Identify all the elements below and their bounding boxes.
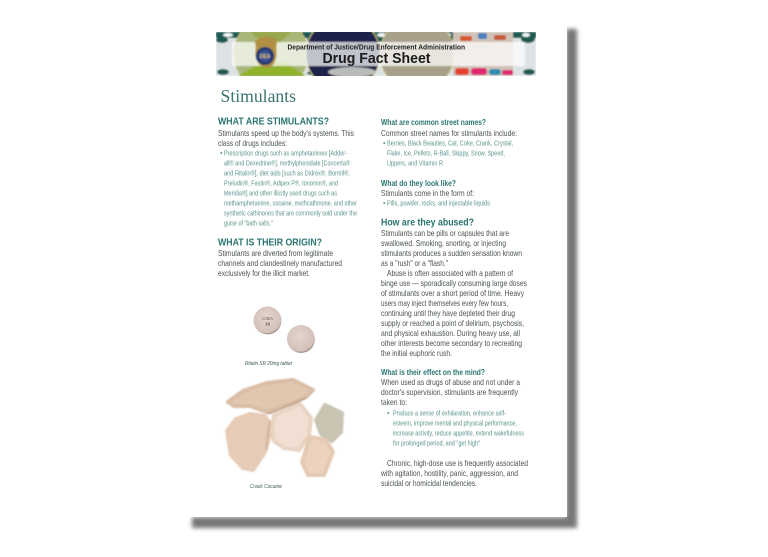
bullet list: street names: • xyxy=(383,138,386,148)
bullet list: street names: Uppers, and Vitamin R xyxy=(387,158,443,168)
bullet list: drugs: Preludin®, Fastin®, Adipex P®, Ionomin®, and xyxy=(224,178,338,188)
bullet list: street names: Flake, Ice, Pellets, R-Ball, Skippy, Snow, Speed, xyxy=(387,148,505,158)
text block: intro: class of drugs includes: xyxy=(218,139,287,148)
banner circle: powder xyxy=(380,32,454,76)
bullet: forms: Pills, powder, rocks, and injectable liquids xyxy=(387,198,490,208)
text block: chronic use xyxy=(380,459,528,488)
heading: origin: WHAT IS THEIR ORIGIN? xyxy=(218,238,322,248)
bullet: forms: • xyxy=(383,198,386,208)
heading: look like: What do they look like? xyxy=(381,178,456,188)
bullet list: drugs: guise of "bath salts." xyxy=(224,218,273,228)
bullet list: drugs: methamphetamine, cocaine, methcathinone, and other xyxy=(224,198,357,208)
text block: origin xyxy=(218,249,342,278)
text block: intro: Stimulants speed up the body's systems. This xyxy=(218,129,354,138)
text block: abuse: the initial euphoric rush. xyxy=(381,349,452,358)
DEA badge xyxy=(255,36,277,68)
banner pills xyxy=(453,32,513,76)
text block: abuse: Stimulants can be pills or capsules that are xyxy=(381,229,509,238)
bullet list: effects xyxy=(387,408,524,448)
text block: abuse: continuing until they have depleted their drug xyxy=(381,309,515,318)
text block: street names intro: Common street names for stimulants include: xyxy=(381,129,517,138)
title: Stimulants xyxy=(220,86,296,106)
text block: chronic use: Chronic, high-dose use is frequently associated xyxy=(387,459,528,468)
text block: chronic use: suicidal or homicidal tendencies. xyxy=(381,479,477,488)
text block: abuse: of stimulants over a short period of time. Heavy xyxy=(381,289,525,298)
banner circle: marijuana leaf xyxy=(233,32,308,76)
bullet list: effects: for prolonged period, and "get high" xyxy=(393,438,480,448)
bullet list: effects: Produce a sense of exhilaration, enhance self- xyxy=(393,408,506,418)
left column text xyxy=(218,116,357,278)
text block: abuse: as a "rush" or a "flash." xyxy=(381,259,448,268)
bullet list: street names: Berries, Black Beauties, Cat, Coke, Crank, Crystal, xyxy=(387,138,513,148)
text block: intro xyxy=(218,129,354,148)
text block: chronic use: with agitation, hostility, panic, aggression, and xyxy=(380,469,518,478)
bullet list: street names xyxy=(383,138,513,168)
text block: effect intro xyxy=(381,378,520,407)
bullet list: effects: esteem, improve mental and physical performance, xyxy=(393,418,517,428)
text block: abuse: other interests become secondary to recreating xyxy=(381,339,522,348)
text block: abuse: and physical exhaustion. During heavy use, all xyxy=(381,329,520,338)
text block: abuse: supply or reached a point of delirium, psychosis, xyxy=(381,319,524,328)
heading: how abused: How are they abused? xyxy=(381,218,474,228)
bullet list: drugs: • xyxy=(220,148,223,158)
banner xyxy=(216,32,536,76)
page shadow xyxy=(192,29,577,528)
bullet list: effects: increase activity, reduce appetite, extend wakefulness xyxy=(393,428,524,438)
DEA badge: DEA xyxy=(260,54,271,60)
text block: effect intro: doctor's supervision, stimulants are frequently xyxy=(381,388,519,397)
text block: origin: Stimulants are diverted from legitimate xyxy=(218,249,333,258)
photo: Ritalin tablets xyxy=(254,306,315,353)
text block: abuse: binge use — sporadically consuming large doses xyxy=(381,279,527,288)
bullet list: drugs: Meridia®] and other illicitly used drugs such as xyxy=(224,188,337,198)
heading: effect on mind: What is their effect on the mind? xyxy=(381,367,485,377)
banner heading: Drug Fact Sheet: Drug Fact Sheet xyxy=(322,51,431,67)
text block: abuse: users may inject themselves every few hours, xyxy=(381,299,508,308)
text block: abuse xyxy=(381,229,527,358)
bullet list: drugs: synthetic cathinones that are commonly sold under the xyxy=(224,208,357,218)
bullet list: drugs: and Ritalin®], diet aids [such as Didrex®, Bontril®, xyxy=(224,168,350,178)
banner circle: navy xyxy=(306,32,380,76)
text block: forms intro: Stimulants come in the form of: xyxy=(381,189,474,198)
bullet list: effects: • xyxy=(387,408,390,418)
text block: effect intro: taken to: xyxy=(381,398,407,407)
photo: crack cocaine xyxy=(227,380,342,475)
right column text xyxy=(380,117,528,488)
bullet list: drugs: all® and Dexedrine®], methylphenidate [Concerta® xyxy=(224,158,351,168)
photo: Ritalin tablets: 16 xyxy=(265,322,270,328)
text block: origin: exclusively for the illicit market. xyxy=(218,269,310,278)
bullet list: drugs: Prescription drugs such as amphetamines [Adder- xyxy=(224,148,347,158)
banner translucent strip xyxy=(232,42,525,66)
text block: origin: channels and clandestinely manufactured xyxy=(218,259,342,268)
caption: Ritalin: Ritalin SR 20mg tablet xyxy=(245,361,292,367)
page sheet xyxy=(186,24,567,517)
heading: street names: What are common street names? xyxy=(381,117,486,127)
banner heading: agency: Department of Justice/Drug Enforcement Administration xyxy=(288,42,465,52)
caption: crack cocaine: Crack Cocaine xyxy=(250,484,282,490)
bullet list: drugs xyxy=(220,148,357,228)
text block: abuse: swallowed. Smoking, snorting, or injecting xyxy=(381,239,506,248)
heading: what are stimulants: WHAT ARE STIMULANTS? xyxy=(218,116,329,128)
text block: effect intro: When used as drugs of abuse and not under a xyxy=(381,378,520,387)
text block: abuse: stimulants produces a sudden sensation known xyxy=(381,249,522,258)
text block: abuse: Abuse is often associated with a pattern of xyxy=(387,269,514,278)
photo: Ritalin tablets: CIBA xyxy=(262,316,274,322)
